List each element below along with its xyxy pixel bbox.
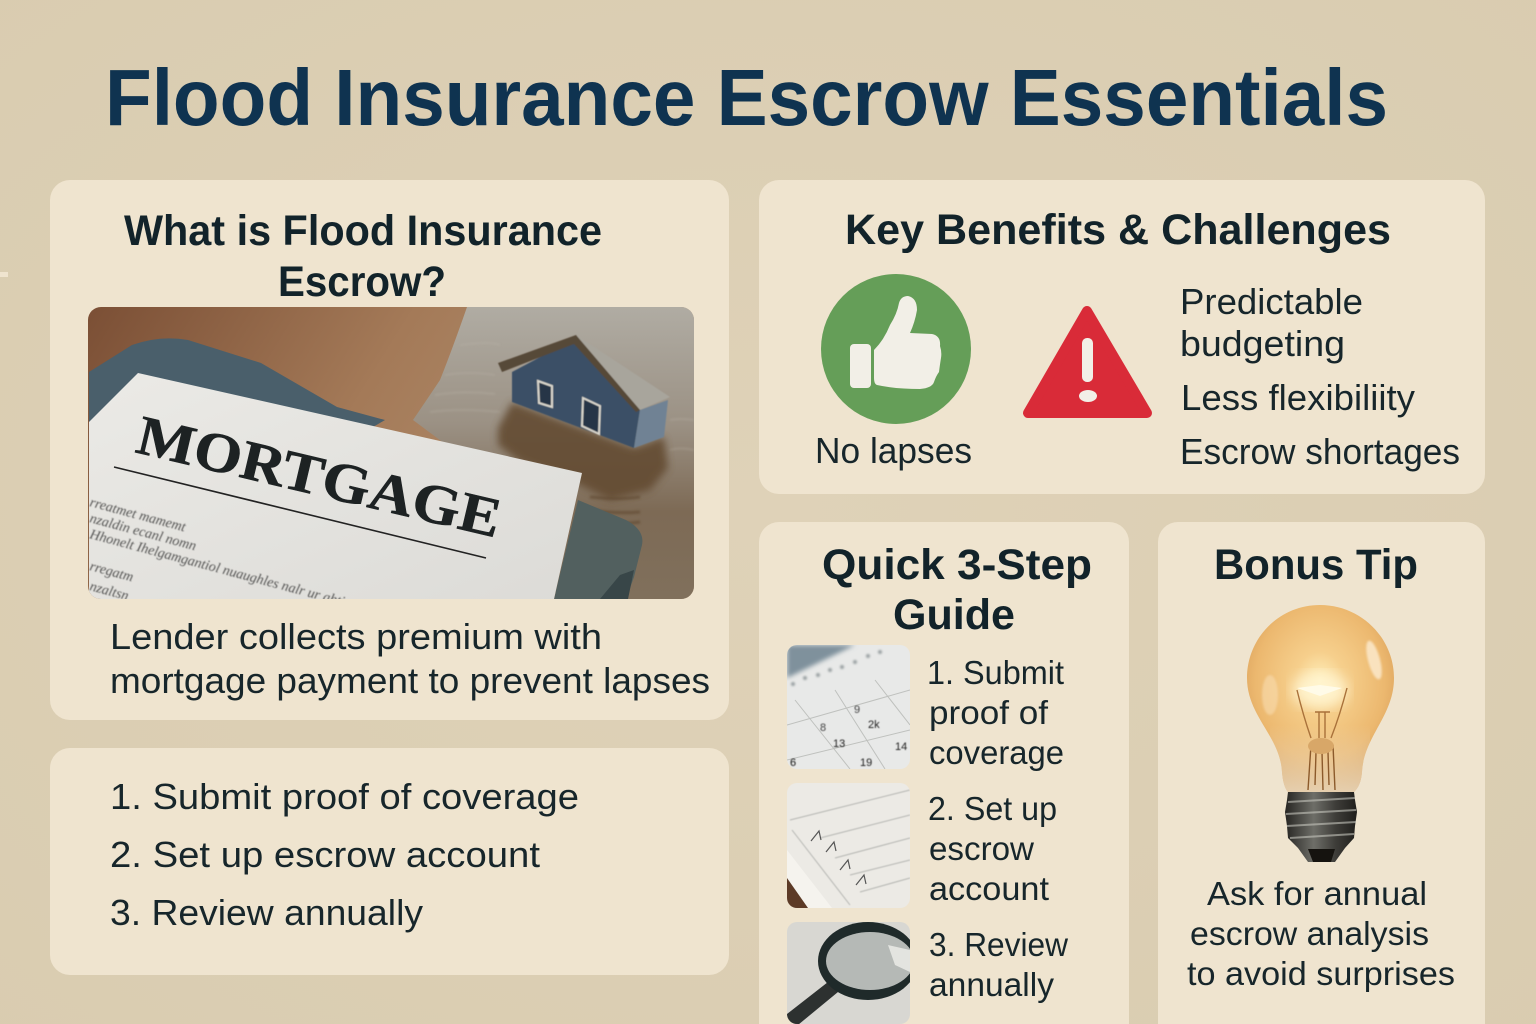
heading: what is flood insurance escrow: Escrow? xyxy=(278,258,446,306)
steps list text: 2. Set up escrow account xyxy=(110,834,540,875)
panel: bonus tip xyxy=(1158,522,1485,1024)
benefits and challenges list: Predictable xyxy=(1180,281,1363,322)
blue blanket xyxy=(89,338,385,426)
step labels: coverage xyxy=(929,734,1064,771)
steps list text: 3. Review annually xyxy=(110,892,423,933)
bonus tip text: to avoid surprises xyxy=(1187,955,1455,992)
description text: Lender collects premium with xyxy=(110,616,602,657)
step labels: 3. Review xyxy=(929,926,1068,963)
panel: key benefits and challenges xyxy=(759,180,1485,494)
description text xyxy=(110,616,710,701)
icon: thumbs up xyxy=(821,274,971,424)
bonus tip text: Ask for annual xyxy=(1207,875,1427,912)
description text: mortgage payment to prevent lapses xyxy=(110,660,710,701)
step labels: 1. Submit xyxy=(927,654,1064,691)
benefits and challenges list: Less flexibiliity xyxy=(1181,377,1415,418)
document fine print: rreatmet mamemt xyxy=(88,495,188,536)
step labels: proof of xyxy=(929,694,1049,731)
photo: calendar: 2k xyxy=(868,719,880,731)
step labels: 2. Set up xyxy=(928,790,1057,827)
photo: calendar: 8 xyxy=(820,722,826,734)
icon: light bulb xyxy=(1240,600,1400,862)
photo: mortgage document and flooded house xyxy=(87,307,694,624)
step labels: annually xyxy=(929,966,1054,1003)
photo: magnifying glass xyxy=(787,922,918,1024)
photo: calendar: 9 xyxy=(854,704,860,716)
document fine print: Hhonelt Ihelgamgantiol nuaughles nalr ur ahtion tn dmt xyxy=(87,527,398,624)
document fine print: rregatm xyxy=(88,559,135,585)
icon: warning triangle xyxy=(1028,311,1147,413)
photo: calendar: 13 xyxy=(833,738,845,750)
benefits and challenges list xyxy=(1180,281,1460,472)
water reflection xyxy=(498,402,668,500)
bonus tip text xyxy=(1187,875,1455,992)
photo: checklist xyxy=(787,783,910,908)
benefits and challenges list: Escrow shortages xyxy=(1180,431,1460,472)
panel: what is flood insurance escrow xyxy=(50,180,729,720)
heading: what is flood insurance escrow xyxy=(124,207,602,306)
heading: quick 3-step guide: Guide xyxy=(893,591,1015,639)
step labels: account xyxy=(929,870,1049,907)
photo: calendar: 6 xyxy=(790,757,796,769)
title: Flood Insurance Escrow Essentials xyxy=(105,53,1388,142)
panel: quick 3-step guide xyxy=(759,522,1129,1024)
step labels xyxy=(927,654,1068,1003)
flooded house xyxy=(498,335,670,448)
mortgage paper xyxy=(89,373,582,599)
heading: quick 3-step guide xyxy=(822,541,1092,639)
panel: numbered steps list xyxy=(50,748,729,975)
heading: what is flood insurance escrow: What is Flood Insurance xyxy=(124,207,602,255)
heading: quick 3-step guide: Quick 3-Step xyxy=(822,541,1092,589)
mortgage headline: MORTGAGE xyxy=(131,404,507,550)
benefits and challenges list: budgeting xyxy=(1180,323,1345,364)
steps list text xyxy=(110,776,579,933)
document fine print: nzaltsn xyxy=(88,579,130,604)
photo: calendar: 19 xyxy=(860,757,872,769)
steps list text: 1. Submit proof of coverage xyxy=(110,776,579,817)
heading: bonus tip: Bonus Tip xyxy=(1214,541,1418,589)
heading: key benefits and challenges: Key Benefits & Challenges xyxy=(845,206,1391,254)
document fine print: nzaldin ecanl nomn xyxy=(88,511,198,554)
document fine print xyxy=(88,500,346,599)
photo: calendar: 14 xyxy=(895,741,907,753)
bonus tip text: escrow analysis xyxy=(1190,915,1429,952)
label: no lapses: No lapses xyxy=(815,430,972,471)
step labels: escrow xyxy=(929,830,1034,867)
photo: calendar xyxy=(787,645,910,769)
